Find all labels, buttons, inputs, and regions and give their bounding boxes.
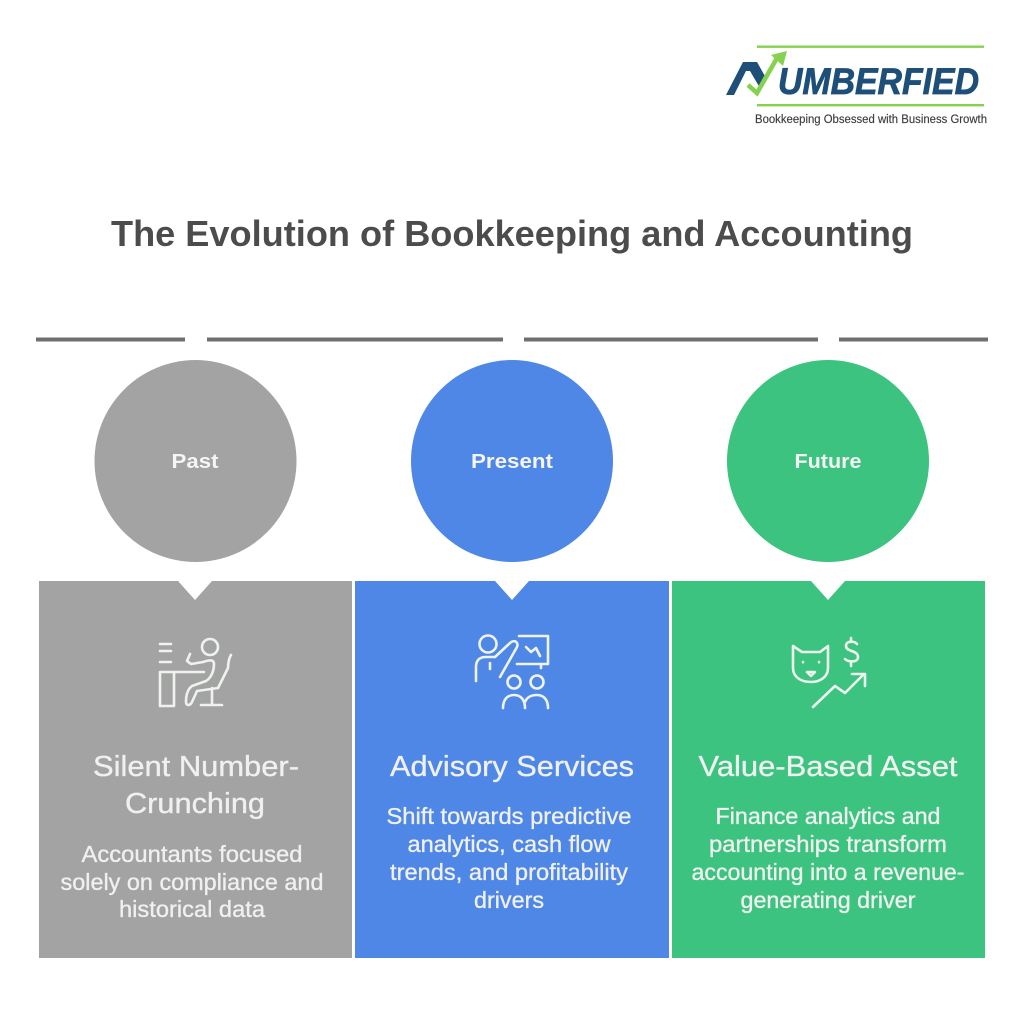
present description: drivers bbox=[474, 887, 544, 913]
panel: future bbox=[672, 360, 985, 958]
panel: present bbox=[355, 360, 669, 958]
future circle bbox=[727, 360, 929, 562]
future card background bbox=[672, 581, 985, 958]
present description: Shift towards predictive bbox=[386, 803, 632, 829]
future description bbox=[692, 803, 964, 913]
future description: accounting into a revenue- bbox=[692, 859, 964, 885]
past description bbox=[60, 841, 324, 922]
past description: Accountants focused bbox=[82, 841, 302, 867]
past heading: Crunching bbox=[125, 788, 265, 820]
icon: N mark with growth arrow bbox=[726, 51, 787, 95]
present circle bbox=[411, 360, 613, 562]
present description: analytics, cash flow bbox=[408, 831, 611, 857]
past description: historical data bbox=[119, 896, 265, 922]
icon: presenter with audience bbox=[476, 636, 548, 708]
logo wordmark: UMBERFIED bbox=[778, 61, 979, 102]
past description: solely on compliance and bbox=[60, 869, 324, 895]
present circle: Present bbox=[471, 451, 553, 473]
present description bbox=[386, 803, 632, 913]
past card background bbox=[39, 581, 352, 958]
logo: Numberfied bbox=[726, 46, 987, 126]
present card background bbox=[355, 581, 669, 958]
present heading: Advisory Services bbox=[390, 751, 634, 783]
future circle: Future bbox=[794, 451, 862, 473]
future description: Finance analytics and bbox=[716, 803, 940, 829]
past circle: Past bbox=[172, 451, 219, 473]
logo tagline: Bookkeeping Obsessed with Business Growth bbox=[755, 114, 987, 126]
future description: generating driver bbox=[740, 887, 916, 913]
icon: person at desk bbox=[160, 639, 231, 706]
timeline line bbox=[36, 338, 988, 342]
future heading: Value-Based Asset bbox=[698, 751, 958, 783]
past heading: Silent Number- bbox=[93, 751, 299, 783]
panel: past bbox=[39, 360, 352, 958]
present description: trends, and profitability bbox=[390, 859, 629, 885]
title: The Evolution of Bookkeeping and Accounting bbox=[111, 213, 913, 254]
icon: cat face, dollar and growth arrow bbox=[793, 638, 865, 707]
future description: partnerships transform bbox=[709, 831, 947, 857]
past heading bbox=[93, 751, 299, 820]
past circle bbox=[94, 360, 296, 562]
